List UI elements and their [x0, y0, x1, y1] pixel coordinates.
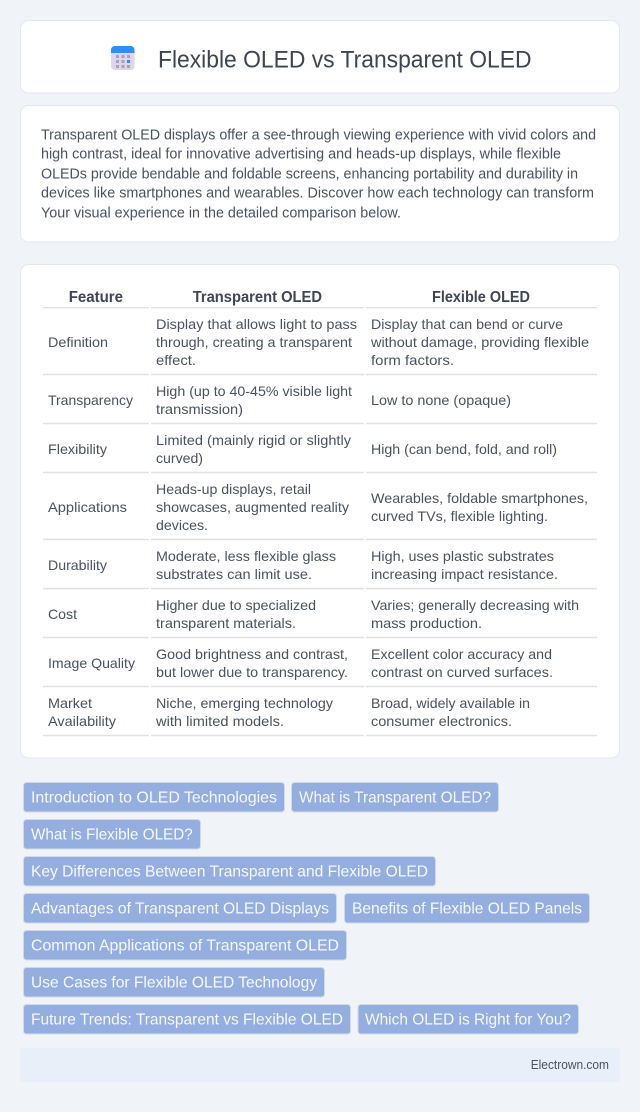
intro paragraph: [41, 126, 596, 221]
tag: which OLED: Which OLED is Right for You?: [365, 1012, 571, 1029]
row: durability: Moderate, less flexible glass: [156, 548, 336, 564]
row: market availability: Market: [48, 695, 92, 711]
topic tags: [24, 782, 590, 1034]
table header row: [69, 289, 530, 306]
panel: introduction: [20, 106, 620, 242]
row: applications: Heads-up displays, retail: [156, 481, 311, 497]
tag: what is transparent OLED: What is Transparent OLED?: [299, 790, 491, 807]
row: definition: through, creating a transparent: [156, 334, 352, 350]
tag: key differences: Key Differences Between Transparent and Flexible OLED: [31, 864, 428, 881]
row: market availability: Availability: [48, 713, 116, 729]
tag: use cases: [24, 968, 324, 997]
row: definition: [48, 316, 589, 368]
row: applications: devices.: [156, 517, 208, 533]
table header row: Flexible OLED: [432, 289, 530, 306]
row: image quality: Image Quality: [48, 655, 135, 671]
row: transparency: [48, 383, 511, 417]
intro paragraph: Transparent OLED displays offer a see-through viewing experience with vivid colors and: [41, 126, 596, 143]
row: market availability: with limited models.: [155, 713, 284, 729]
tag: future trends: Future Trends: Transparent vs Flexible OLED: [31, 1012, 343, 1029]
row: definition: Display that allows light to pass: [156, 316, 357, 332]
row: applications: Applications: [48, 499, 127, 515]
tag: what is flexible OLED: [24, 820, 200, 849]
intro paragraph: Your visual experience in the detailed comparison below.: [41, 204, 401, 221]
intro paragraph: OLEDs provide bendable and foldable screens, enhancing portability and durability in: [41, 165, 578, 182]
tag: which OLED: [358, 1004, 578, 1034]
tag: common applications: [24, 930, 346, 960]
tag: benefits: Benefits of Flexible OLED Panels: [352, 901, 582, 918]
row: cost: transparent materials.: [156, 615, 296, 631]
tag: use cases: Use Cases for Flexible OLED Technology: [31, 975, 317, 992]
table header row: Feature: [69, 289, 123, 306]
tag: advantages: Advantages of Transparent OLED Displays: [31, 901, 329, 918]
row: transparency: Low to none (opaque): [371, 392, 511, 408]
row: definition: Definition: [48, 334, 108, 350]
row: applications: curved TVs, flexible lighting.: [371, 508, 548, 524]
footer: [20, 1048, 620, 1082]
row: image quality: contrast on curved surfaces.: [371, 664, 553, 680]
row: market availability: Niche, emerging technology: [156, 695, 333, 711]
icon: calendar: [111, 46, 134, 70]
row: image quality: Excellent color accuracy and: [371, 646, 552, 662]
row: cost: Varies; generally decreasing with: [371, 597, 579, 613]
intro paragraph: devices like smartphones and wearables. Discover how each technology can transform: [41, 184, 594, 201]
tag: what is flexible OLED: What is Flexible OLED?: [31, 827, 193, 844]
tag: common applications: Common Applications of Transparent OLED: [31, 938, 339, 955]
title: Flexible OLED vs Transparent OLED: [158, 46, 532, 74]
row: transparency: transmission): [156, 401, 243, 417]
row: cost: Higher due to specialized: [156, 597, 316, 613]
row: applications: [48, 481, 588, 533]
row: flexibility: Limited (mainly rigid or slightly: [156, 432, 351, 448]
header panel: [20, 20, 620, 93]
row: applications: Wearables, foldable smartphones,: [371, 490, 588, 506]
row: flexibility: curved): [156, 450, 203, 466]
row: market availability: Broad, widely available in: [371, 695, 530, 711]
row: image quality: but lower due to transparency.: [156, 664, 348, 680]
row: flexibility: Flexibility: [48, 441, 107, 457]
row: definition: Display that can bend or curve: [371, 316, 563, 332]
row: durability: [48, 548, 558, 582]
row: durability: substrates can limit use.: [156, 566, 312, 582]
tag: what is transparent OLED: [292, 782, 498, 812]
tag: introduction: [24, 782, 284, 812]
row: market availability: [48, 695, 530, 729]
intro paragraph: high contrast, ideal for innovative advertising and heads-up displays, while flexible: [41, 145, 561, 162]
row: market availability: consumer electronics.: [371, 713, 512, 729]
row: transparency: Transparency: [48, 392, 133, 408]
row: cost: Cost: [48, 606, 77, 622]
footer: Electrown.com: [531, 1057, 609, 1072]
row: flexibility: [48, 432, 557, 466]
row: definition: form factors.: [371, 352, 454, 368]
row: durability: High, uses plastic substrates: [371, 548, 554, 564]
row: cost: [48, 597, 579, 631]
tag: introduction: Introduction to OLED Technologies: [31, 790, 277, 807]
row: image quality: [48, 646, 553, 680]
row: durability: increasing impact resistance.: [371, 566, 558, 582]
row: cost: mass production.: [371, 615, 482, 631]
tag: benefits: [344, 894, 590, 923]
row: transparency: High (up to 40-45% visible light: [156, 383, 352, 399]
row: definition: effect.: [156, 352, 196, 368]
tag: advantages: [24, 894, 336, 923]
row: image quality: Good brightness and contrast,: [156, 646, 348, 662]
row: definition: without damage, providing flexible: [370, 334, 589, 350]
row: flexibility: High (can bend, fold, and roll): [371, 441, 557, 457]
tag: key differences: [24, 856, 436, 886]
tag: future trends: [24, 1004, 350, 1034]
table header row: Transparent OLED: [193, 289, 322, 306]
row: durability: Durability: [48, 557, 107, 573]
row: applications: showcases, augmented reality: [156, 499, 349, 515]
panel: comparison table: [20, 264, 620, 758]
